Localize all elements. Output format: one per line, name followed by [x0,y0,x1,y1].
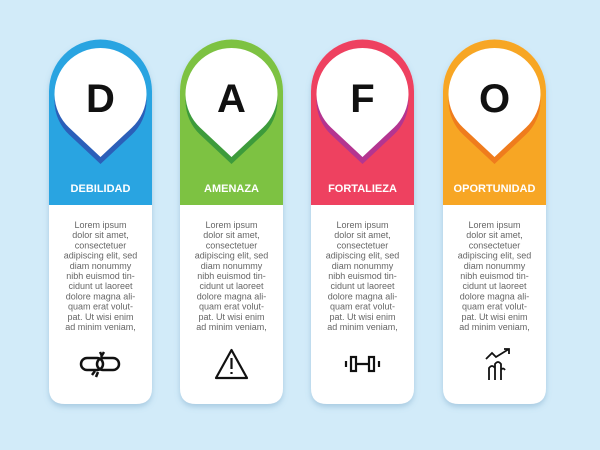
icon: growth chart [486,349,509,380]
body text: cidunt ut laoreet [199,281,264,291]
body text: cidunt ut laoreet [330,281,395,291]
body text: nibh euismod tin- [328,271,397,281]
card: debilidad [49,40,152,404]
body text: Lorem ipsum [336,220,389,230]
body text: consectetuer [469,240,520,250]
body text: diam nonummy [464,261,526,271]
body text: diam nonummy [70,261,132,271]
body text: ad minim veniam, [65,322,136,332]
body text: Lorem ipsum [74,220,127,230]
body text: consectetuer [337,240,388,250]
label: AMENAZA [204,183,259,195]
card: fortalieza [311,40,414,404]
letter F: F [350,77,375,121]
body text: nibh euismod tin- [460,271,529,281]
body text: ad minim veniam, [327,322,398,332]
body text: dolore magna ali- [460,291,529,301]
body text: dolor sit amet, [334,230,391,240]
pin [54,48,147,157]
body text: nibh euismod tin- [197,271,266,281]
body text: pat. Ut wisi enim [461,312,528,322]
body text: adipiscing elit, sed [195,251,268,261]
body text: adipiscing elit, sed [64,251,137,261]
body text: ad minim veniam, [196,322,267,332]
icon: broken chain [81,352,119,377]
card: oportunidad [443,40,546,404]
body text: diam nonummy [332,261,394,271]
body text: Lorem ipsum [468,220,521,230]
body text: pat. Ut wisi enim [198,312,265,322]
body text: adipiscing elit, sed [458,251,531,261]
body text: dolore magna ali- [328,291,397,301]
body text: cidunt ut laoreet [68,281,133,291]
icon: dumbbell [346,357,379,371]
body text: cidunt ut laoreet [462,281,527,291]
card: amenaza [180,40,283,404]
letter A: A [217,77,246,121]
label: OPORTUNIDAD [454,183,535,195]
icon: warning [216,350,247,378]
body text: adipiscing elit, sed [326,251,399,261]
pin [448,48,540,157]
body text: dolore magna ali- [197,291,266,301]
body text: quam erat volut- [199,302,264,312]
body text: pat. Ut wisi enim [329,312,396,322]
label: FORTALIEZA [328,183,397,195]
letter D: D [86,77,115,121]
body text: Lorem ipsum [205,220,258,230]
body text: ad minim veniam, [459,322,530,332]
body text: quam erat volut- [462,302,527,312]
label: DEBILIDAD [71,183,130,195]
body text: consectetuer [206,240,257,250]
letter O: O [479,77,510,121]
body text: dolor sit amet, [466,230,523,240]
body text: dolor sit amet, [72,230,129,240]
body text: quam erat volut- [330,302,395,312]
pin [316,48,409,157]
body text: nibh euismod tin- [66,271,135,281]
body text: pat. Ut wisi enim [67,312,134,322]
body text: diam nonummy [201,261,263,271]
body text: dolor sit amet, [203,230,260,240]
body text: dolore magna ali- [66,291,135,301]
body text: quam erat volut- [68,302,133,312]
body text: consectetuer [75,240,126,250]
pin [186,48,278,157]
